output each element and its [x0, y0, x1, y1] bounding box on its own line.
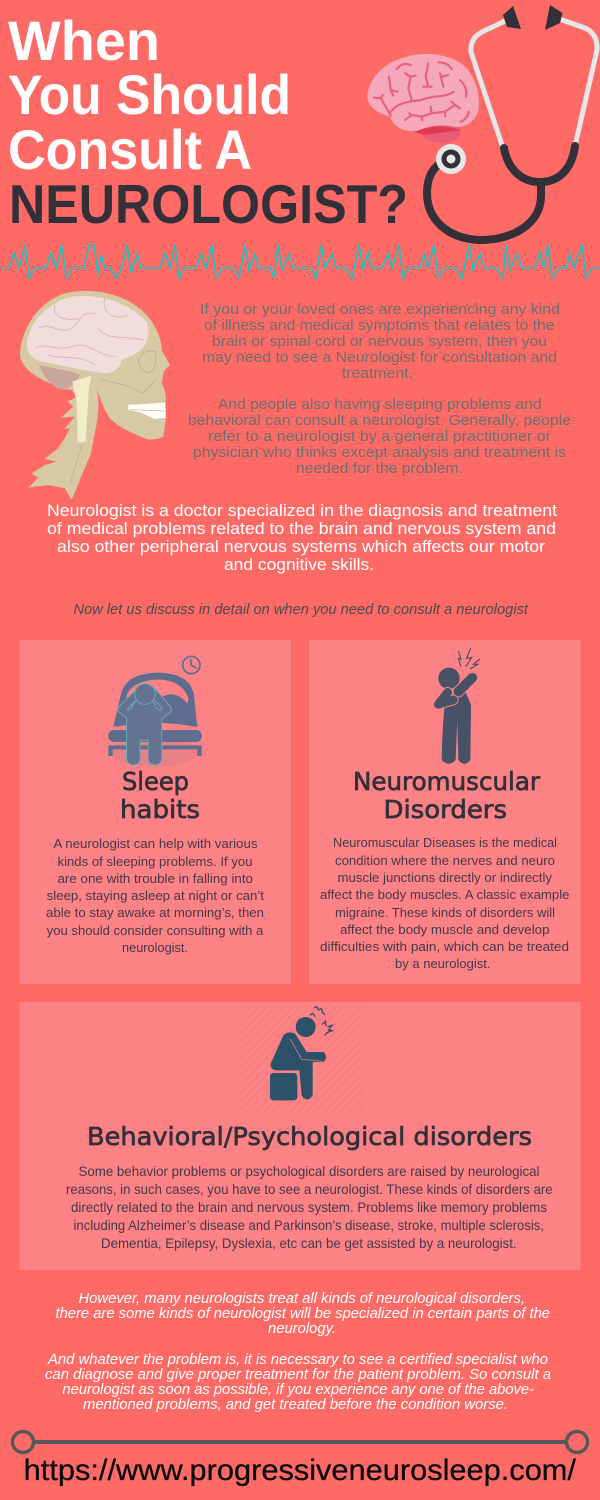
title: NEUROLOGIST?	[9, 173, 408, 235]
body text: Some behavior problems or psychological disorders are raised by neurological	[78, 1163, 540, 1179]
intro text: If you or your loved ones are experiencing any kind	[200, 301, 560, 318]
heading: Behavioral/Psychological disorders	[87, 1122, 532, 1151]
definition text: Neurologist is a doctor specialized in the diagnosis and treatment	[47, 501, 557, 520]
body text: A neurologist can help with various	[54, 836, 258, 851]
body text: are one with trouble in falling into	[58, 871, 253, 886]
website url: https://www.progressiveneurosleep.com/	[24, 1454, 577, 1487]
heading: habits	[120, 795, 200, 824]
intro text: behavioral can consult a neurologist. Generally, people	[188, 412, 571, 429]
icon: person in pain	[438, 648, 480, 764]
closing text: can diagnose and give proper treatment for the patient problem. So consult a	[45, 1366, 551, 1383]
intro text: refer to a neurologist by a general practitioner or	[208, 428, 551, 445]
body text: affect the body muscle and develop	[340, 922, 550, 937]
closing text: neurology.	[268, 1320, 336, 1337]
intro text: And people also having sleeping problems and	[218, 396, 542, 413]
title: Consult A	[8, 118, 252, 181]
body text: including Alzheimer’s disease and Parkinson’s disease, stroke, multiple sclerosis,	[74, 1217, 544, 1233]
body text: condition where the nerves and neuro	[335, 853, 555, 868]
title: You Should	[8, 63, 291, 126]
icon: person awake on bed	[107, 656, 203, 767]
body text	[320, 835, 570, 971]
illustration: skull and spine	[20, 291, 170, 500]
divider with end circles	[12, 1432, 588, 1452]
intro text: may need to see a Neurologist for consultation and	[202, 349, 557, 366]
intro text: physician who thinks except analysis and treatment is	[193, 444, 566, 461]
closing text: there are some kinds of neurologist will be specialized in certain parts of the	[56, 1305, 550, 1322]
body text: neurologist.	[122, 940, 188, 955]
definition text: and cognitive skills.	[224, 555, 374, 574]
body text: kinds of sleeping problems. If you	[58, 854, 252, 869]
body text: Dementia, Epilepsy, Dyslexia, etc can be get assisted by a neurologist.	[101, 1235, 517, 1251]
body text: able to stay awake at morning’s, then	[46, 905, 264, 920]
title	[8, 9, 408, 235]
panel: sleep habits	[20, 640, 291, 984]
closing text: mentioned problems, and get treated before the condition worse.	[83, 1396, 508, 1413]
body text: by a neurologist.	[395, 956, 490, 971]
heading: Sleep	[122, 767, 189, 796]
body text: sleep, staying asleep at night or can’t	[47, 888, 264, 903]
heading: Disorders	[384, 795, 507, 824]
icon: stethoscope	[427, 5, 597, 240]
heading	[120, 767, 200, 824]
panel: neuromuscular disorders	[309, 640, 580, 984]
closing text: However, many neurologists treat all kinds of neurological disorders,	[78, 1290, 525, 1307]
title: When	[8, 9, 160, 72]
body text: reasons, in such cases, you have to see a neurologist. These kinds of disorders are	[66, 1181, 553, 1197]
body text	[46, 836, 264, 955]
closing text: neurologist as soon as possible, if you experience any one of the above-	[62, 1381, 534, 1398]
panel: behavioral and psychological disorders	[20, 1002, 580, 1270]
intro text	[188, 301, 571, 477]
body text: muscle junctions directly or indirectly	[338, 870, 553, 885]
definition text	[47, 501, 557, 574]
intro text: of illness and medical symptoms that relates to the	[204, 317, 554, 334]
closing text	[45, 1290, 551, 1413]
intro text: needed for the problem.	[296, 460, 463, 477]
closing text: And whatever the problem is, it is necessary to see a certified specialist who	[47, 1351, 548, 1368]
body text: migraine. These kinds of disorders will	[335, 905, 555, 920]
ECG line	[2, 245, 600, 278]
intro text: brain or spinal cord or nervous system, then you	[212, 333, 547, 350]
body text	[66, 1163, 553, 1251]
icon: seated person with headache	[241, 1002, 364, 1115]
heading	[353, 767, 541, 824]
definition text: also other peripheral nervous systems which affects our motor	[57, 537, 545, 556]
lead-in text: Now let us discuss in detail on when you need to consult a neurologist	[74, 602, 529, 618]
heading: Neuromuscular	[353, 767, 541, 796]
body text: difficulties with pain, which can be treated	[320, 939, 569, 954]
intro text: treatment.	[342, 365, 413, 382]
icon: brain	[367, 54, 479, 143]
body text: you should consider consulting with a	[47, 923, 264, 938]
body text: Neuromuscular Diseases is the medical	[333, 835, 557, 850]
body text: affect the body muscles. A classic example	[320, 887, 570, 902]
definition text: of medical problems related to the brain and nervous system and	[47, 519, 556, 538]
body text: directly related to the brain and nervous system. Problems like memory problems	[71, 1199, 547, 1215]
